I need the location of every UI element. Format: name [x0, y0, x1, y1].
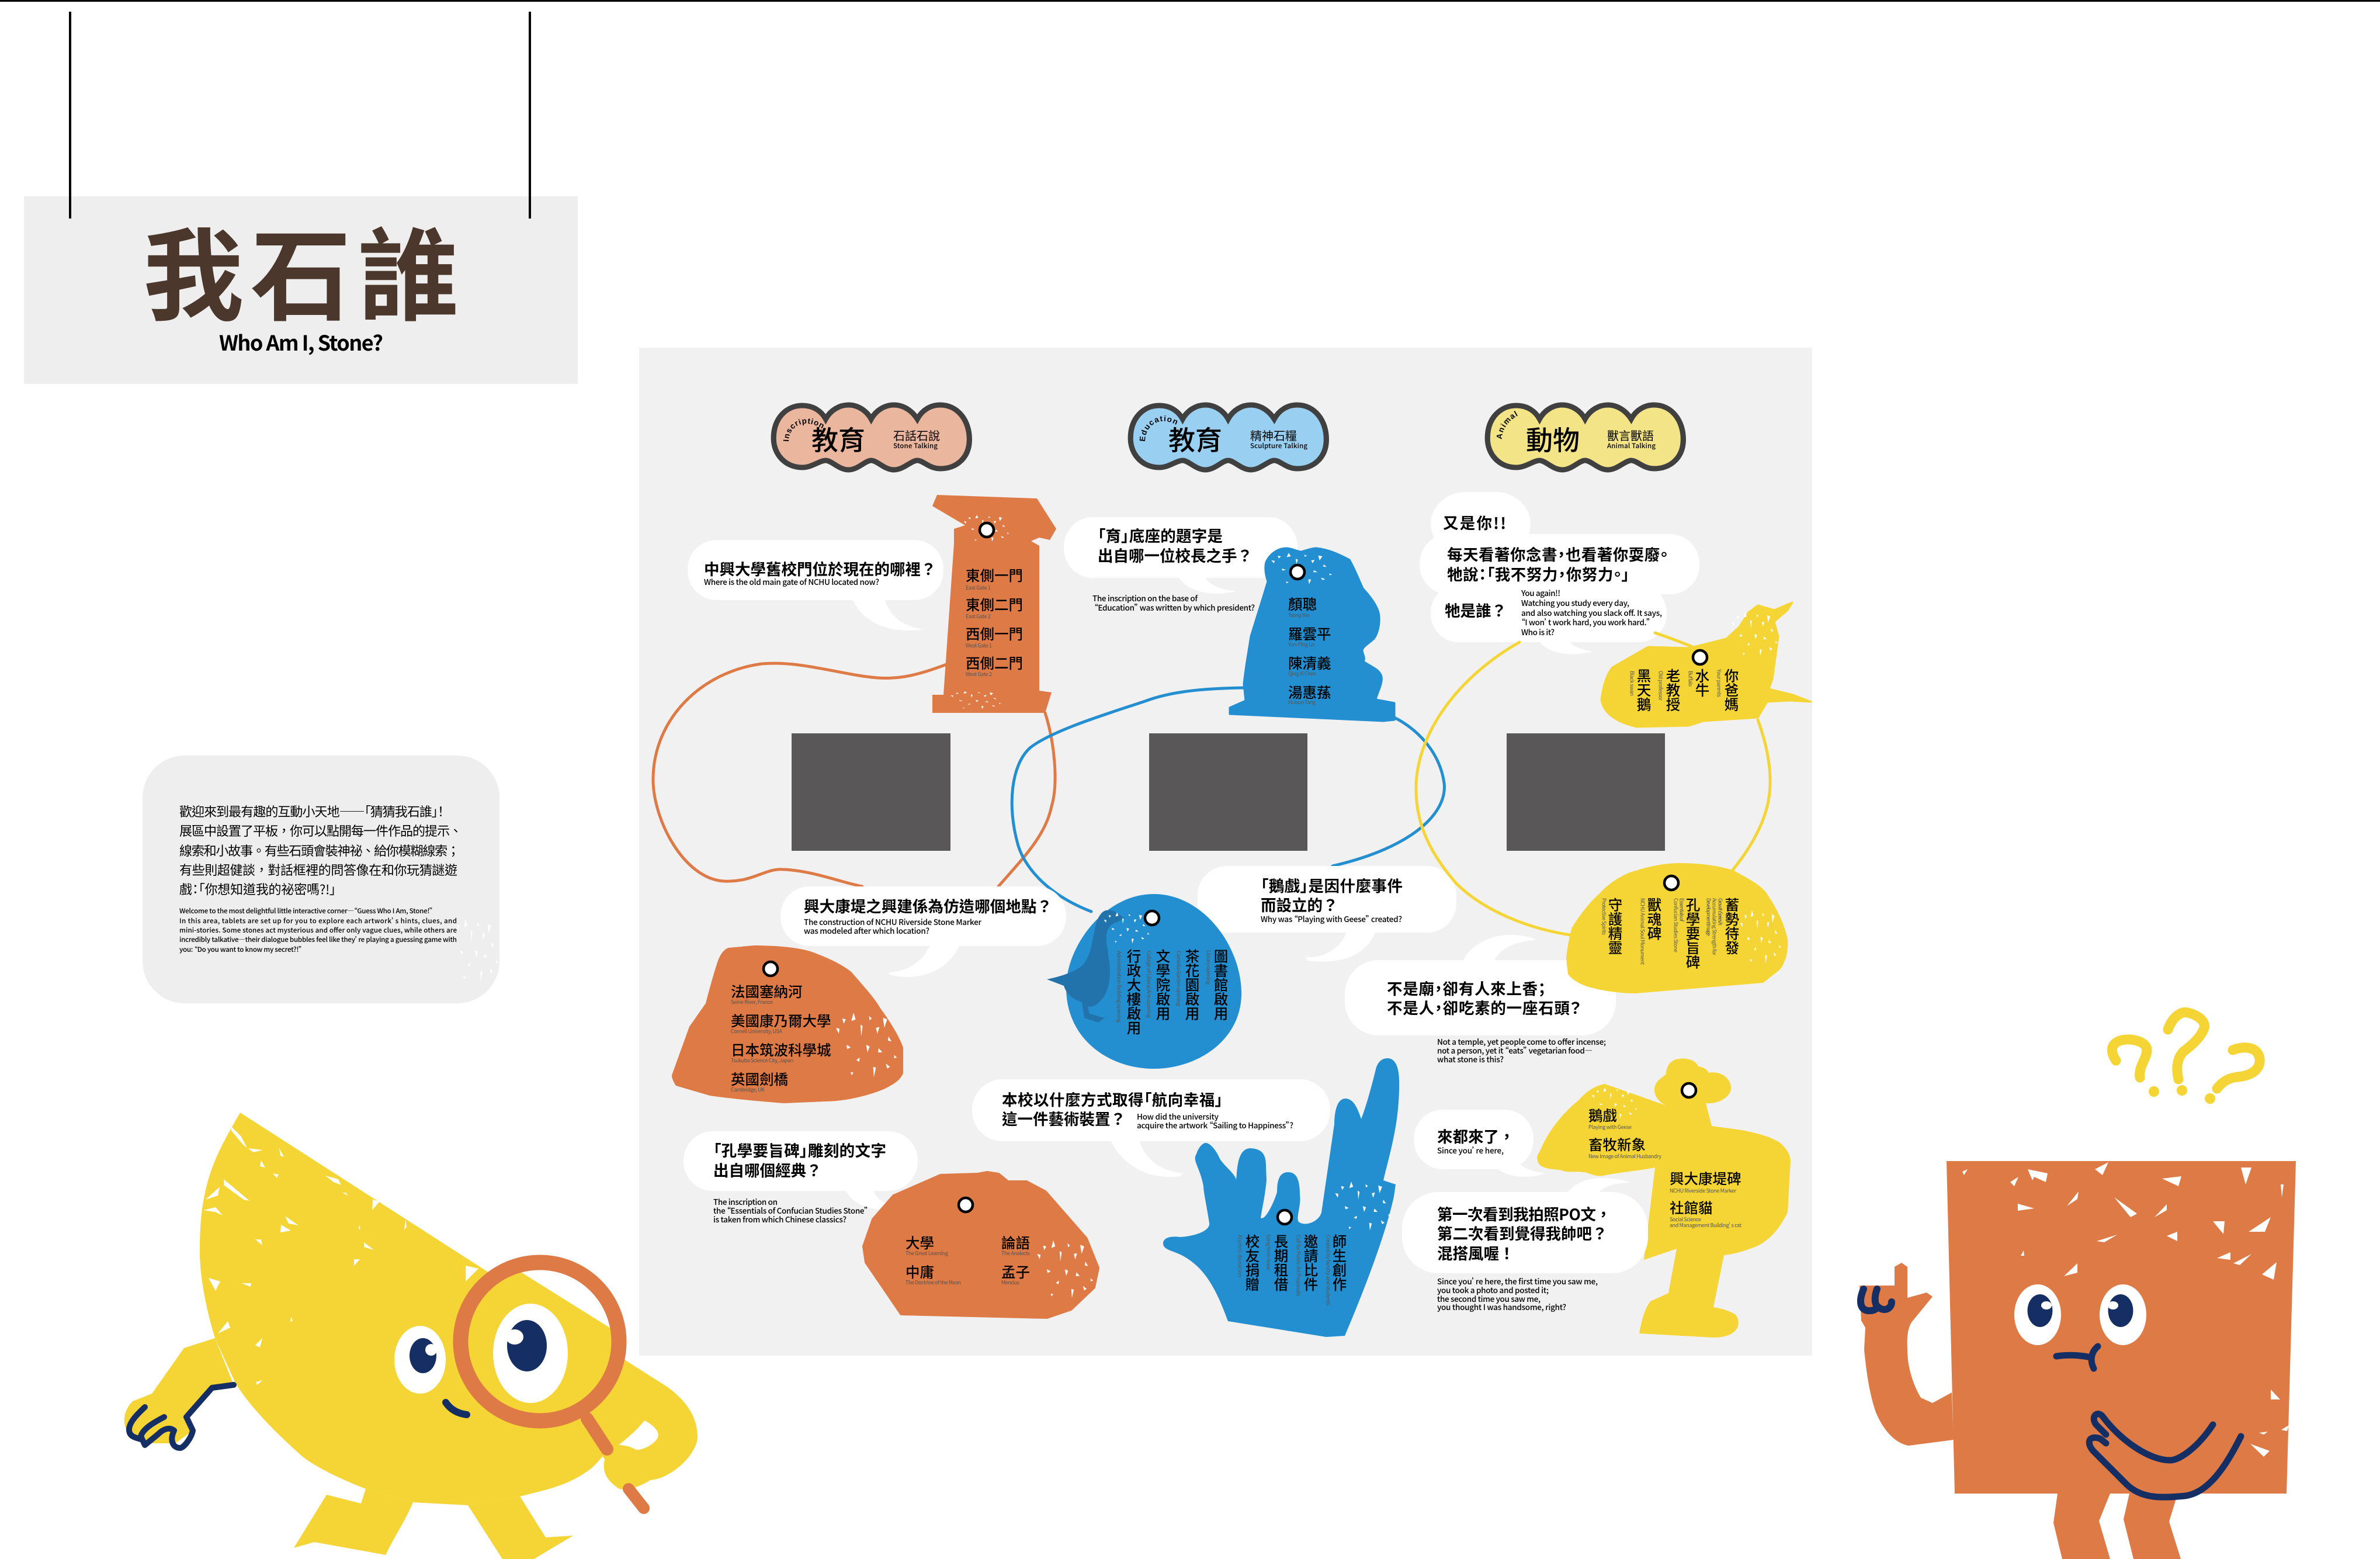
bubble: handsome: 第一次看到我拍照PO文， [1437, 1202, 1611, 1225]
stone: goose egg: 行政大樓啟用 [1124, 949, 1144, 1035]
intro text English: In this area, tablets are set up for you to explore each artwork’s hints, clues, and [179, 916, 457, 926]
stone: old gate: 東側二門 [966, 594, 1023, 615]
stone: goose egg: 文學院啟用 [1153, 949, 1173, 1021]
connector curves: yellow [1416, 633, 1770, 935]
stone: old gate [932, 495, 1056, 713]
intro text English: you: “Do you want to know my secret?!” [179, 945, 302, 954]
bubble: sailing question: 本校以什麼方式取得「航向幸福」 [1002, 1087, 1223, 1110]
bubbles: animal question: “I won’t work hard, you work hard.” [1521, 616, 1650, 628]
stone: yellow rock answers: 孔學要旨碑 [1682, 898, 1704, 969]
stone: yellow rock answers: Protective Spirits [1601, 898, 1608, 935]
body wear marks [203, 1127, 478, 1385]
bubble: education base question: 出自哪一位校長之手？ [1098, 543, 1253, 566]
legs [294, 1489, 573, 1559]
header pill: education: Sculpture Talking [1250, 441, 1307, 451]
tablet placeholder 2 [1149, 733, 1307, 851]
bubble: handsome: 第二次看到覺得我帥吧？ [1437, 1221, 1608, 1244]
stone: blue hand sculpture: 師生創作 [1330, 1234, 1349, 1291]
stone: blue hand sculpture: 長期租借 [1271, 1234, 1291, 1291]
bubble: confucian question: the “Essentials of Confucian Studies Stone” [713, 1204, 868, 1216]
fingers [1861, 1289, 1892, 1311]
icon: goose silhouette [1047, 910, 1125, 1023]
stone: blue hand sculpture: Call for Public Art Proposals [1295, 1235, 1303, 1296]
bubbles: animal question: 又是你!! [1443, 511, 1506, 533]
stone: riverside marker answers [672, 945, 903, 1103]
bubble: handsome: 混搭風喔！ [1437, 1241, 1514, 1264]
bubbles: animal question: Watching you study every day, [1521, 597, 1629, 608]
header pill: animal [1485, 402, 1686, 472]
stone: confucian rock: 中庸 [905, 1262, 934, 1282]
eyes [2014, 1284, 2146, 1345]
bubbles: animal question: Who is it? [1521, 626, 1555, 638]
stone: goose and marker statue [1537, 1059, 1791, 1338]
stone: confucian rock [864, 1173, 1098, 1317]
small eye [394, 1326, 446, 1394]
bubbles: animal question: and also watching you slack off. It says, [1521, 607, 1662, 618]
stone: confucian rock: 大學 [905, 1232, 934, 1253]
header pill: education: 教育 [1168, 420, 1222, 458]
header pill: education [1127, 402, 1329, 472]
bubbles: animal question: 每天看著你念書，也看著你耍廢。 [1447, 542, 1668, 565]
stone: old gate: West Gate 2 [966, 670, 992, 678]
raised arm [1859, 1263, 1954, 1446]
main panel [639, 348, 1812, 1356]
bubble: confucian question: 出自哪個經典？ [713, 1158, 821, 1181]
bubble: old gate question: Where is the old main gate of NCHU located now? [704, 576, 879, 587]
stone: yellow rock answers: Development Image [1705, 898, 1713, 936]
bubble: sailing question: 這一件藝術裝置？ [1002, 1107, 1126, 1130]
bubble: riverside marker question: was modeled after which location? [804, 924, 929, 936]
left hand outline [129, 1385, 234, 1448]
stone: buffalo: Your parents [1715, 668, 1723, 697]
bubble: riverside marker question: 興大康堤之興建係為仿造哪個地點？ [804, 894, 1052, 917]
bubble: temple riddle: Not a temple, yet people come to offer incense; [1437, 1035, 1606, 1047]
stone: riverside marker answers: 日本筑波科學城 [731, 1040, 831, 1060]
stone: goose and marker statue: 畜牧新象 [1588, 1134, 1646, 1155]
stone: confucian rock: Mencius [1001, 1279, 1019, 1286]
character: orange thinker [1859, 1161, 2296, 1559]
stone: blue hand sculpture: 邀請比件 [1300, 1234, 1321, 1291]
bubble: handsome: you took a photo and posted it; [1437, 1284, 1549, 1295]
stone: buffalo: 你爸媽 [1721, 668, 1742, 712]
stone: confucian rock: 論語 [1001, 1232, 1030, 1253]
bubble: since you're here [1414, 1110, 1545, 1177]
stone: riverside marker answers: Cambridge, UK [731, 1086, 765, 1093]
intro text English: mini-stories. Some stones act mysterious and offer only vague clues, while others are [179, 926, 457, 935]
header pill: inscription: Inscription [783, 418, 824, 441]
stone: riverside marker answers: 美國康乃爾大學 [731, 1010, 831, 1031]
bubble: sailing question [972, 1079, 1330, 1177]
header pill: animal: 動物 [1526, 420, 1580, 458]
intro text English [179, 906, 457, 954]
intro text Chinese [179, 802, 462, 898]
stone: goose egg: College of Liberal Arts opening [1145, 951, 1153, 1018]
stone: old gate: East Gate 1 [966, 584, 991, 591]
stone: goose and marker statue: 興大康堤碑 [1670, 1168, 1741, 1189]
stone: buffalo: Old professor [1657, 671, 1665, 701]
connector curves: orange [653, 663, 1055, 886]
bubbles: animal question [1420, 492, 1699, 654]
body wear marks [1962, 1162, 2289, 1457]
bubble: confucian question [684, 1131, 918, 1225]
stone: yellow rock answers: Essentials of [1678, 898, 1686, 922]
stone: goose egg: Administration Building opening [1116, 951, 1123, 1023]
stone: yellow rock answers: 守護精靈 [1605, 898, 1625, 955]
icon: question marks [2112, 1013, 2260, 1104]
bubble: handsome: Since you’re here, the first time you saw me, [1437, 1275, 1598, 1287]
bubble: education base question: 「育」底座的題字是 [1098, 524, 1223, 546]
bubble: education base question: “Education” was written by which president? [1094, 601, 1255, 613]
stone: goose egg: Camellia Garden opening [1175, 951, 1182, 1006]
stone: yellow rock answers: Growth Series A: [1716, 898, 1725, 926]
top rule [0, 0, 2380, 2]
stone: goose egg [1047, 894, 1241, 1069]
stone: old gate: East Gate 2 [966, 612, 991, 620]
title sign [24, 12, 578, 384]
stone: blue hand sculpture: Created by faculty and students [1325, 1235, 1332, 1305]
stone: goose and marker statue: NCHU Riverside Stone Marker [1670, 1187, 1736, 1194]
bubble: confucian question: The inscription on [713, 1196, 778, 1207]
stone: riverside marker answers: Tsukuba Science City, Japan [731, 1056, 793, 1064]
stone: confucian rock: The Doctrine of the Mean [905, 1279, 961, 1286]
stone: yellow rock answers [1566, 863, 1788, 993]
header pill: inscription: 教育 [811, 420, 865, 458]
stone: buffalo: 水牛 [1692, 668, 1713, 697]
bubble: since you're here: 來都來了， [1437, 1124, 1514, 1147]
bubble: confucian question: 「孔學要旨碑」雕刻的文字 [713, 1138, 886, 1161]
bubble: handsome [1402, 1178, 1648, 1312]
tablet placeholder 1 [792, 733, 950, 851]
folded arm [2089, 1414, 2241, 1497]
header pill: animal: Animal [1497, 411, 1518, 439]
stone: old gate: 西側一門 [966, 623, 1023, 644]
stone: bust statue [1230, 548, 1394, 721]
bubble: old gate question [688, 540, 943, 630]
stone: bust statue: 羅雲平 [1288, 623, 1331, 644]
stone: bust statue: Huisun Tang [1288, 698, 1316, 706]
bubble: riverside marker question: The construction of NCHU Riverside Stone Marker [804, 916, 981, 927]
stone: blue hand sculpture: Alumni donation [1236, 1235, 1244, 1277]
bubbles: animal question: You again!! [1521, 587, 1560, 598]
stone: riverside marker answers: 法國塞納河 [731, 981, 803, 1002]
header pill: education: Education [1139, 415, 1178, 441]
stone: bust statue: 湯惠蓀 [1288, 682, 1331, 702]
stone: yellow rock answers: 獸魂碑 [1644, 898, 1665, 941]
header pill: inscription: 石話石說 [893, 427, 940, 444]
bubble: temple riddle [1345, 935, 1616, 1065]
bubble: handsome: you thought I was handsome, right? [1437, 1301, 1566, 1312]
stone: goose egg: Library opening [1205, 950, 1213, 985]
body [200, 1113, 629, 1505]
bubble: old gate question: 中興大學舊校門位於現在的哪裡？ [704, 557, 936, 580]
character: yellow detective [124, 1113, 698, 1559]
stone: confucian rock: 孟子 [1001, 1262, 1030, 1282]
stone: buffalo: 黑天鵝 [1633, 668, 1654, 712]
smile [446, 1402, 467, 1415]
bubble: handsome: the second time you saw me, [1437, 1293, 1541, 1304]
bubble: geese question: 「鵝戲」是因什麼事件 [1261, 874, 1403, 896]
stone: confucian rock: The Analects [1001, 1249, 1030, 1257]
bubble: temple riddle: what stone is this? [1437, 1053, 1504, 1065]
bubble: since you're here: Since you’re here, [1437, 1144, 1504, 1156]
bubbles: animal question: 牠說：「我不努力，你努力。」 [1447, 562, 1629, 585]
stone: goose and marker statue: Playing with Geese [1588, 1123, 1632, 1131]
tablet placeholder 3 [1507, 733, 1665, 851]
right arm [584, 1360, 698, 1489]
stone: blue hand sculpture: Long-term lease [1265, 1235, 1272, 1270]
stone: bust statue: Qing-Yi Chen [1288, 670, 1316, 677]
bubble: geese question: 而設立的？ [1261, 893, 1338, 916]
bubble: temple riddle: 不是廟，卻有人來上香； [1387, 976, 1546, 999]
intro text Chinese: 戲：「你想知道我的祕密嗎?!」 [179, 879, 336, 898]
bubble: geese question: Why was “Playing with Geese” created? [1261, 913, 1402, 924]
stone: riverside marker answers: Seine River, France [731, 998, 773, 1006]
body [1947, 1161, 2296, 1494]
mouth [2056, 1346, 2098, 1369]
stone: blue hand sculpture [1163, 1058, 1399, 1337]
bubble: education base question [1064, 517, 1297, 613]
bubble: temple riddle: 不是人，卻吃素的一座石頭？ [1387, 996, 1581, 1018]
header pill: animal: Animal Talking [1607, 441, 1656, 451]
header pill: education: 精神石糧 [1250, 427, 1297, 444]
header pill: inscription [771, 402, 972, 472]
stone: goose and marker statue: 鵝戲 [1588, 1105, 1617, 1125]
bubble: riverside marker question [780, 886, 1066, 977]
stone: old gate: 東側一門 [966, 565, 1023, 586]
stone: goose egg: 圖書館啟用 [1210, 949, 1231, 1021]
stone: yellow rock answers: NCHU Animal Soul Monument [1639, 898, 1646, 965]
stone: bust statue: Tsong Yen [1288, 611, 1310, 619]
intro text Chinese: 有些則超健談，對話框裡的問答像在和你玩猜謎遊 [179, 860, 457, 879]
stone: goose and marker statue: Social Science [1670, 1215, 1701, 1223]
stone: old gate: 西側二門 [966, 653, 1023, 673]
stone: yellow rock answers: Accumulating Strength for [1711, 898, 1719, 956]
stone: goose egg: 茶花園啟用 [1182, 949, 1202, 1021]
stone: blue hand sculpture: 校友捐贈 [1242, 1234, 1263, 1291]
header pill: animal: 獸言獸語 [1607, 427, 1654, 444]
stone: buffalo: 老教授 [1663, 668, 1684, 712]
intro text Chinese: 展區中設置了平板，你可以點開每一件作品的提示、 [179, 821, 462, 840]
bubble: geese question [1198, 866, 1456, 962]
stone: bust statue: 陳清義 [1288, 653, 1331, 673]
bubble: education base question: The inscription on the base of [1092, 592, 1198, 604]
left arm [124, 1338, 234, 1443]
bubble: sailing question: How did the university [1137, 1110, 1219, 1122]
stone: buffalo: Black swan [1629, 671, 1636, 696]
legs [2053, 1494, 2181, 1559]
intro text English: Welcome to the most delightful little interactive corner—“Guess Who I Am, Stone!” [179, 906, 433, 916]
bubble: temple riddle: not a person, yet it “eats” vegetarian food— [1437, 1044, 1593, 1056]
stone: yellow rock answers: 蓄勢待發 [1722, 898, 1742, 955]
intro text Chinese: 線索和小故事。有些石頭會裝神祕、給你模糊線索； [179, 841, 460, 860]
magnifying glass [460, 1262, 644, 1508]
stone: buffalo [1601, 602, 1811, 727]
intro panel [143, 756, 499, 1003]
intro text Chinese: 歡迎來到最有趣的互動小天地——「猜猜我石誰」！ [179, 802, 444, 820]
bubble: confucian question: is taken from which Chinese classics? [713, 1213, 846, 1225]
stone: riverside marker answers: Cornell University, USA [731, 1027, 783, 1035]
stone: riverside marker answers: 英國劍橋 [731, 1069, 788, 1089]
bubbles: animal question: 牠是誰？ [1445, 598, 1507, 621]
stone: buffalo: Buffalo [1687, 671, 1694, 687]
heading: 我石誰: 我石誰 [143, 195, 459, 341]
stone: goose and marker statue: New Image of Animal Husbandry [1588, 1152, 1661, 1160]
stone: bust statue: Yun-Ping Lo [1288, 640, 1314, 648]
bubble: sailing question: acquire the artwork “Sailing to Happiness”? [1137, 1119, 1293, 1131]
header pill: inscription: Stone Talking [893, 441, 938, 451]
stone: yellow rock answers: Confucian Studies Stone [1672, 898, 1680, 952]
stone: goose and marker statue: 社館貓 [1670, 1197, 1713, 1218]
connector curves: blue [1012, 688, 1444, 912]
stone: confucian rock: The Great Learning [905, 1249, 948, 1257]
stone: bust statue: 顏聰 [1288, 594, 1317, 614]
subtitle: Who Am I, Stone? [219, 327, 383, 357]
stone: goose and marker statue: and Management Building’s cat [1670, 1221, 1742, 1229]
intro text English: incredibly talkative—their dialogue bubbles feel like they’re playing a guessing game with [179, 935, 457, 944]
stone: old gate: West Gate 1 [966, 642, 992, 649]
